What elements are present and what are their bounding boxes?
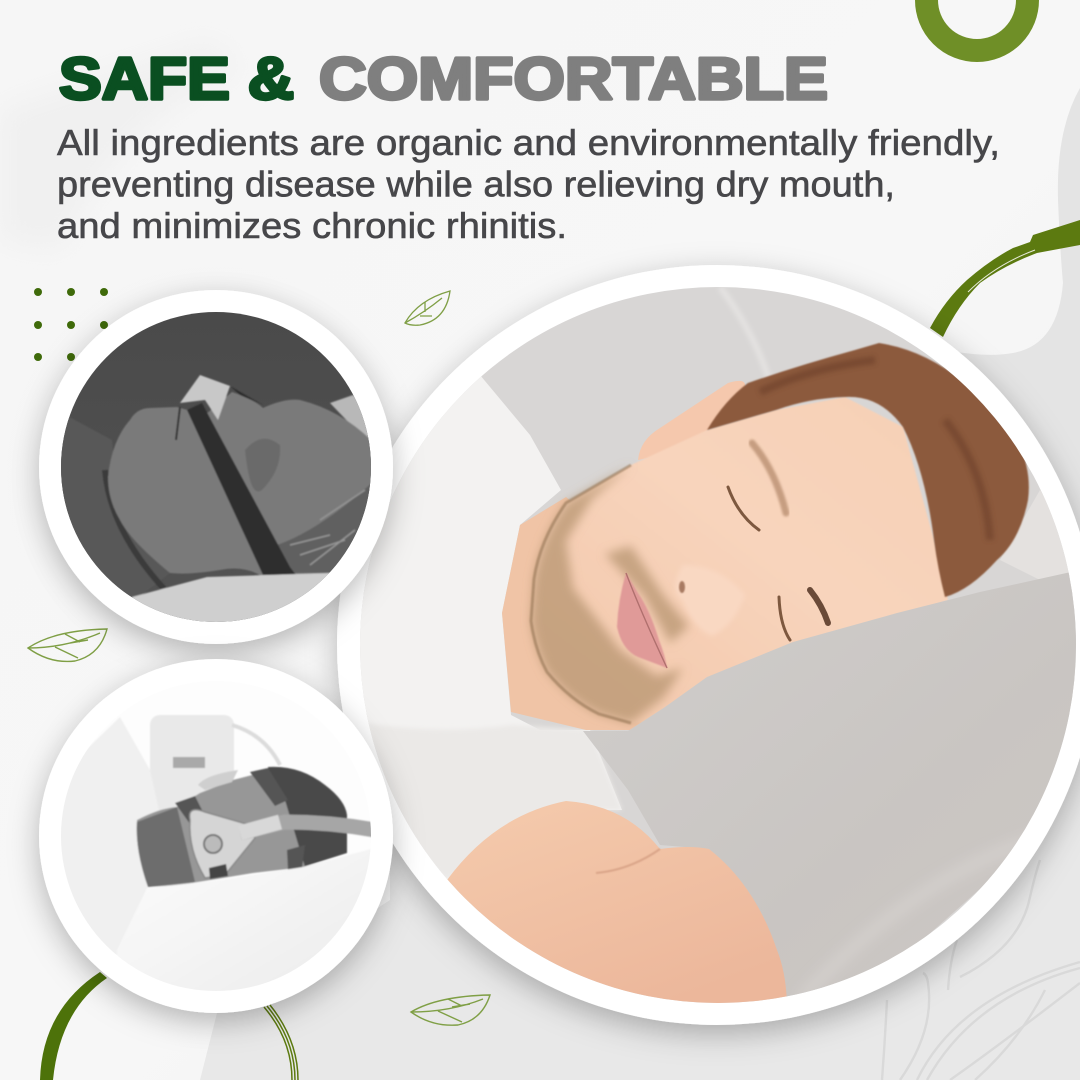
shirt lower shading [366,723,622,880]
icon: leaf top [405,291,450,325]
grey hair [278,484,370,573]
shirt [61,718,152,954]
body text [57,122,1000,246]
icon: leaf bottom [411,995,490,1025]
photo frame [39,659,393,1013]
goggles reflection [198,770,238,790]
ear [245,439,280,492]
jaw line [531,465,631,723]
photo frame [39,290,393,644]
arm [447,801,787,1010]
nasal mask [180,375,230,420]
body text: and minimizes chronic rhinitis. [57,205,567,246]
ear [638,381,745,460]
photo frame [337,265,1080,1025]
beard [531,465,689,723]
body text: preventing disease while also relieving dry mouth, [57,164,895,204]
neck [502,497,642,730]
nasal mask photo [60,310,380,630]
strap [187,403,296,575]
title [59,46,828,112]
full mask photo [61,714,371,991]
face [137,773,305,887]
decoration: bottom left brush stroke [40,972,107,1080]
panel: man with full CPAP mask [39,659,393,1013]
hair [707,343,1029,597]
shirt upper [350,375,622,880]
title: SAFE & [59,46,294,112]
front pillow [583,570,1080,1003]
pillow [132,572,330,622]
lips [617,573,667,668]
pillow [142,850,370,991]
decoration: dot grid [34,288,108,361]
head [108,392,375,577]
icon: leaf left [28,629,107,661]
upper eye [728,443,786,530]
hair [268,767,347,867]
nose [676,567,741,634]
panel: man with nasal CPAP [39,290,393,644]
title: COMFORTABLE [319,46,828,112]
sleeping man scene [350,280,1080,1010]
decoration: top right brush stroke [930,220,1080,337]
mouth crease [176,407,180,440]
body text: All ingredients are organic and environmentally friendly, [57,122,1000,163]
sweater [60,412,170,620]
CPAP machine [150,715,280,815]
lower eye [779,590,828,640]
straps [175,768,305,870]
mask [190,810,255,878]
tube [240,822,375,833]
panel: main photo of sleeping man [337,265,1080,1025]
face [531,397,948,723]
decoration: bottom arc [264,1005,298,1080]
decoration: green ring [926,0,1028,50]
